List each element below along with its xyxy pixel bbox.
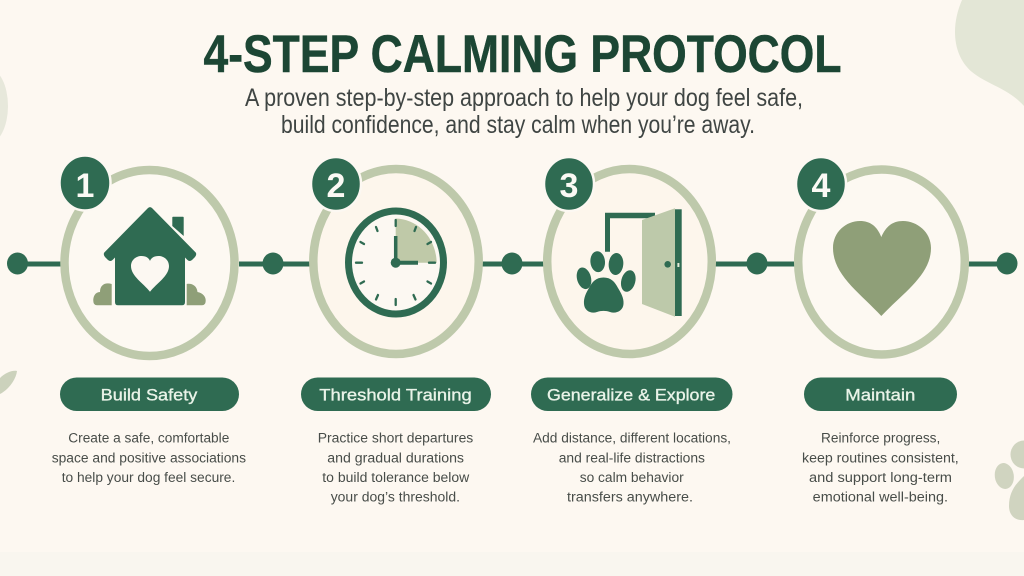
ring — [547, 169, 712, 354]
step description: and gradual durations — [327, 450, 464, 466]
subtitle: A proven step-by-step approach to help your dog feel safe, — [245, 84, 803, 112]
step 2: threshold training — [301, 157, 491, 506]
ring — [313, 169, 479, 354]
ring — [64, 170, 234, 356]
number badge — [544, 157, 594, 211]
number badge: 4 — [812, 167, 831, 205]
step description: transfers anywhere. — [567, 490, 693, 506]
icon: paw and open door — [574, 208, 682, 317]
step 1: build safety — [52, 156, 246, 486]
step description: Practice short departures — [318, 430, 473, 446]
timeline connector — [7, 252, 1018, 274]
step description — [52, 430, 246, 486]
step label pill — [301, 378, 491, 411]
step description: and support long-term — [809, 470, 952, 486]
decorative leaf: left edge — [0, 371, 17, 394]
number badge — [796, 157, 846, 211]
number badge — [60, 156, 110, 210]
step 4: maintain — [796, 157, 965, 506]
subtitle — [245, 84, 803, 139]
decorative blob: top right — [955, 0, 1024, 106]
number badge: 3 — [560, 167, 578, 205]
decorative blob: left edge — [0, 68, 8, 144]
title: 4-STEP CALMING PROTOCOL — [204, 25, 842, 84]
decorative paw: bottom right — [993, 440, 1024, 520]
step label pill — [531, 378, 732, 411]
ring — [798, 170, 965, 354]
icon: clock — [348, 211, 444, 314]
step description: so calm behavior — [580, 470, 684, 486]
step description — [802, 430, 959, 506]
subtitle: build confidence, and stay calm when you’re away. — [281, 111, 755, 139]
step description: your dog’s threshold. — [331, 490, 460, 506]
step description: Add distance, different locations, — [533, 430, 731, 446]
step description: keep routines consistent, — [802, 450, 959, 466]
step description: to build tolerance below — [322, 470, 470, 486]
step description: and real-life distractions — [559, 450, 705, 466]
step label pill: Maintain — [845, 386, 915, 404]
icon: heart — [833, 221, 931, 316]
number badge — [311, 157, 361, 211]
number badge: 2 — [327, 167, 345, 205]
step label pill — [60, 378, 239, 411]
step description: emotional well-being. — [813, 490, 948, 506]
step description — [318, 430, 473, 506]
step label pill — [804, 378, 957, 411]
step label pill: Threshold Training — [319, 386, 472, 404]
step description: Reinforce progress, — [821, 430, 940, 446]
number badge: 1 — [76, 167, 94, 205]
step label pill: Build Safety — [101, 386, 198, 404]
step 3: generalize and explore — [531, 157, 732, 506]
icon: house with heart — [93, 207, 206, 305]
step description: to help your dog feel secure. — [62, 470, 235, 486]
step description: space and positive associations — [52, 450, 246, 466]
step description: Create a safe, comfortable — [68, 430, 229, 446]
step description — [533, 430, 731, 506]
step label pill: Generalize & Explore — [547, 386, 715, 404]
